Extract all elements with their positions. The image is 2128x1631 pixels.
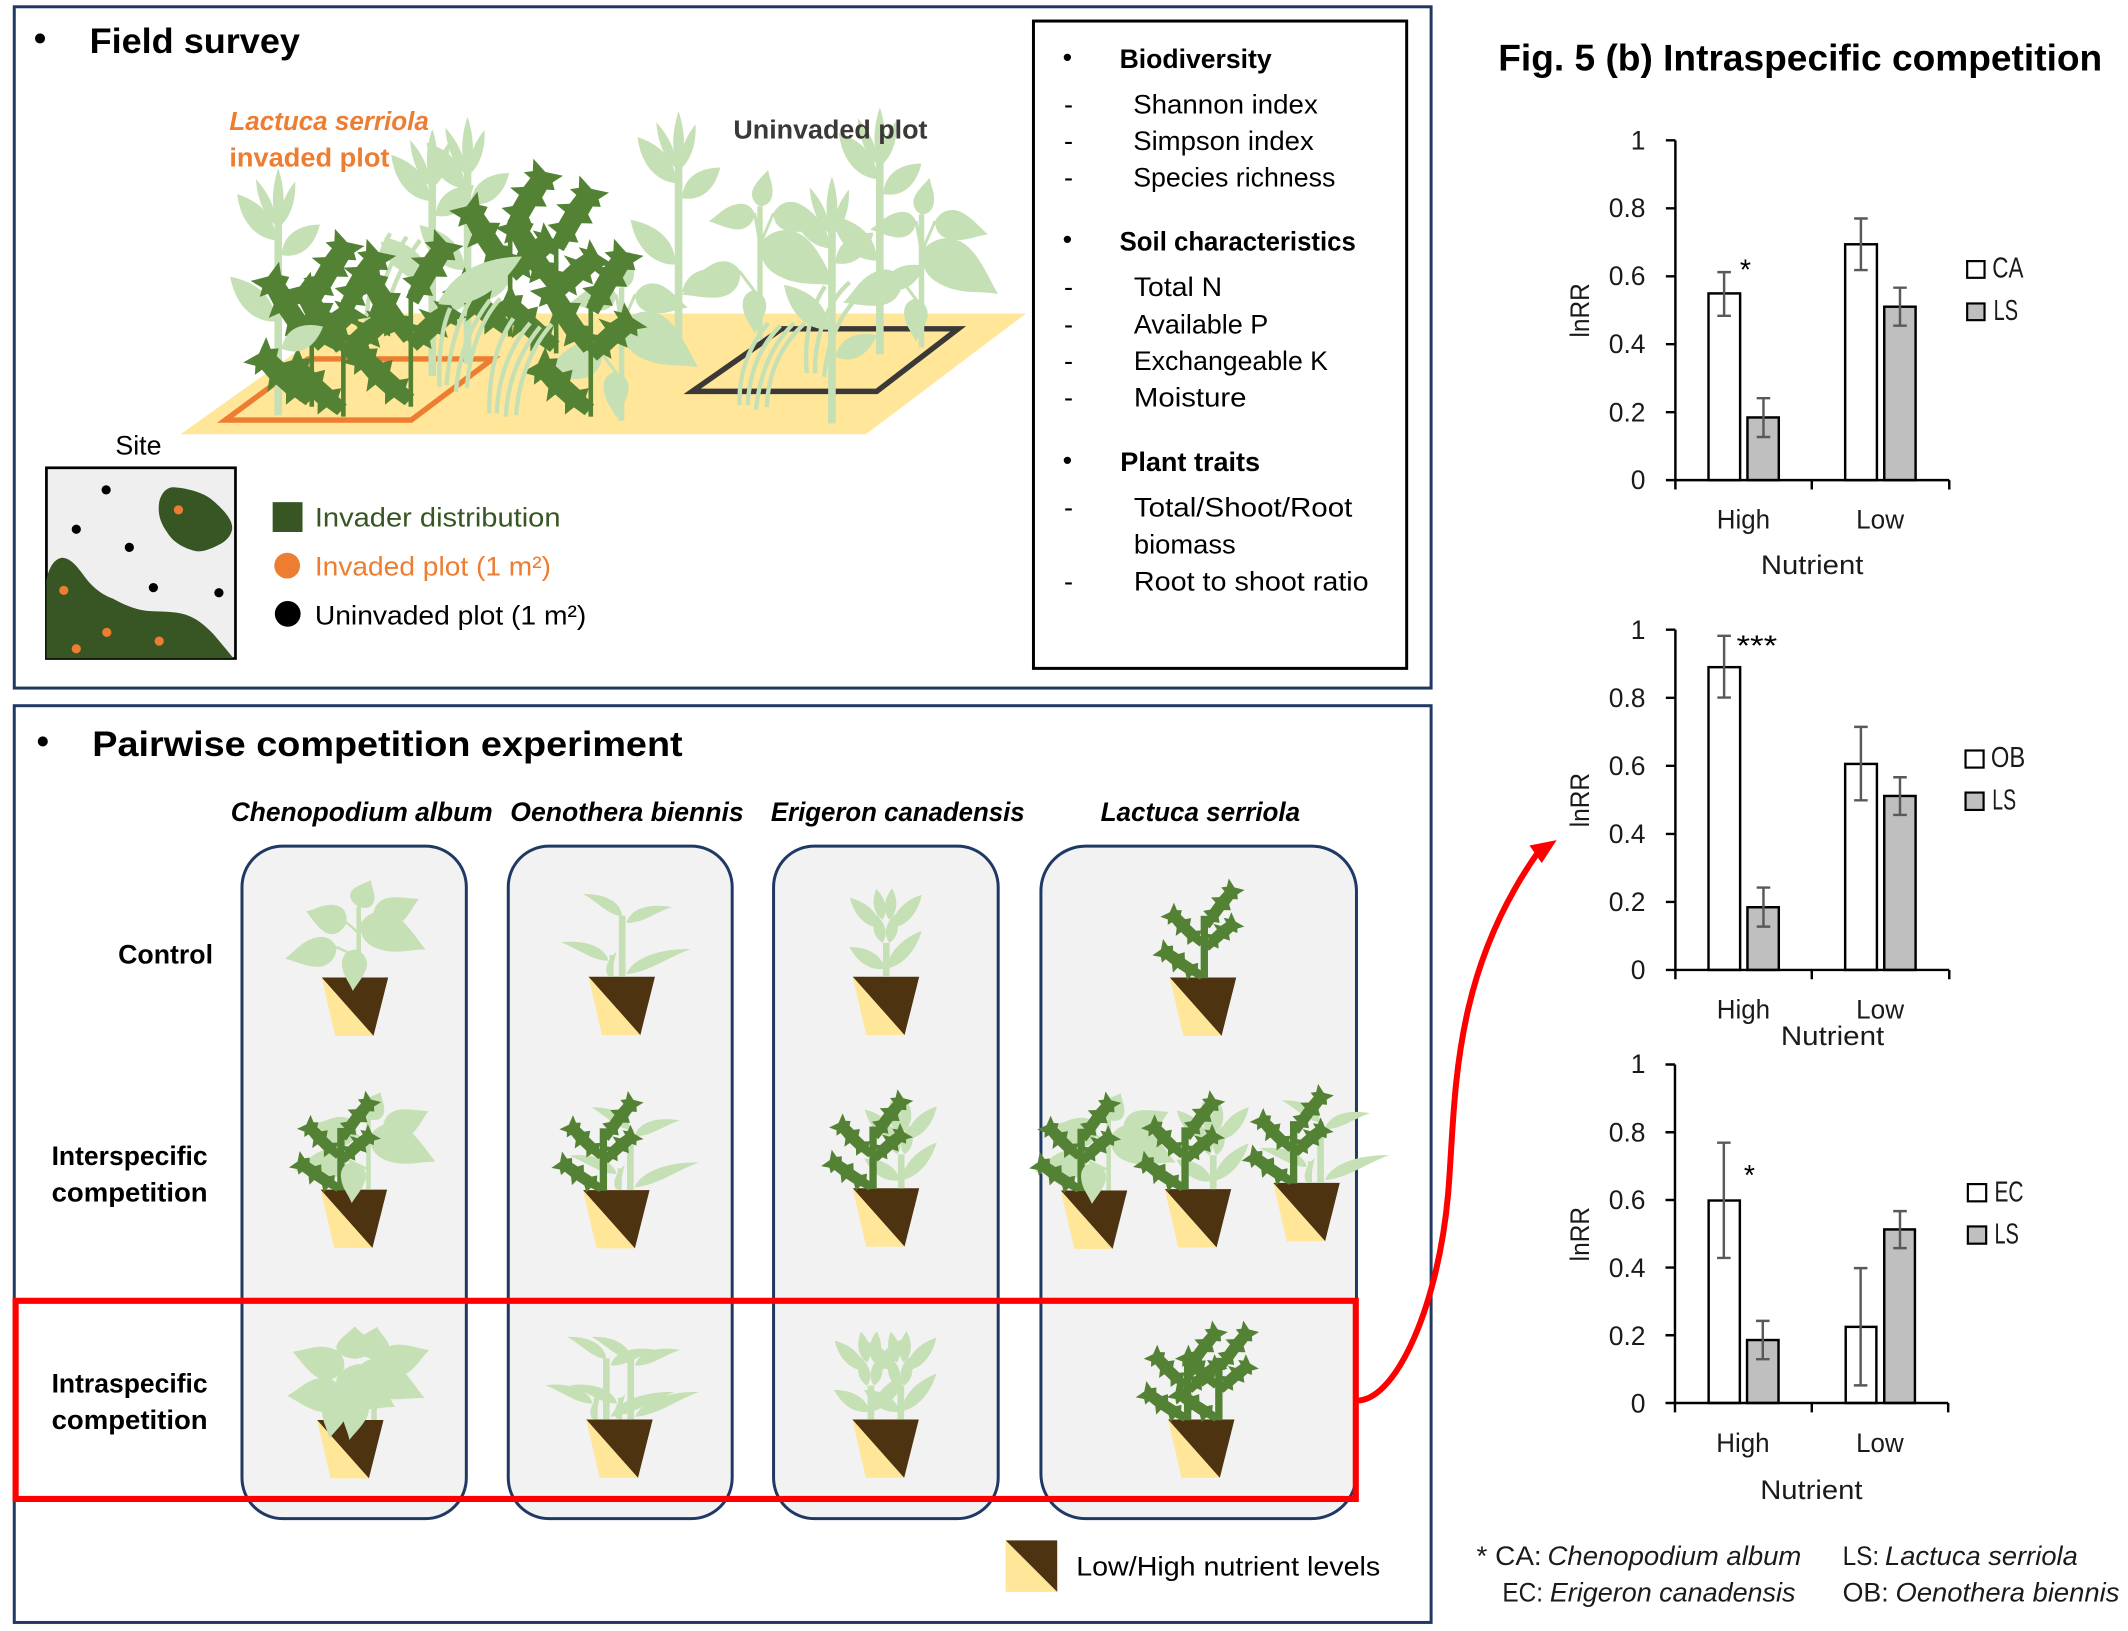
list: plant traits: Total/Shoot/Root <box>1134 492 1353 523</box>
list: soil characteristics: - <box>1064 382 1073 413</box>
significance marker: * <box>1744 1160 1755 1192</box>
x axis labels <box>1716 1428 1905 1505</box>
legend: LS <box>1994 1219 2019 1251</box>
list: soil characteristics: - <box>1064 345 1073 376</box>
interspecific pot <box>819 1087 942 1247</box>
y axis labels: 0.4 <box>1609 1253 1646 1283</box>
y axis labels: 0.8 <box>1609 193 1646 223</box>
y axis labels: 0.6 <box>1609 1185 1646 1215</box>
row label: control: Control <box>118 940 213 970</box>
row label: intraspecific competition <box>52 1368 208 1435</box>
control pot <box>560 887 692 1035</box>
species heading: Lactuca serriola: Lactuca serriola <box>1101 797 1300 827</box>
control pot <box>282 875 433 1036</box>
legend: low/high nutrient levels: Low/High nutrient levels <box>1076 1551 1380 1582</box>
ground <box>181 313 1026 434</box>
list: soil characteristics: Exchangeable K <box>1134 345 1328 376</box>
uninvaded plot outline <box>692 329 958 391</box>
x axis labels: High <box>1717 504 1770 534</box>
control pot <box>1151 877 1245 1036</box>
list: plant traits: • <box>1063 445 1072 476</box>
significance marker: *** <box>1736 630 1777 662</box>
footnote: species abbreviations: Oenothera biennis <box>1896 1577 2119 1607</box>
row label: interspecific competition <box>52 1141 208 1208</box>
legend <box>1966 742 2025 817</box>
light leaves behind dark plants <box>374 232 428 280</box>
legend: invaded plot: Invaded plot (1 m²) <box>315 550 551 581</box>
control pot <box>845 888 927 1035</box>
heading: pairwise competition experiment: • <box>37 722 49 761</box>
column: Lactuca serriola <box>1027 846 1390 1519</box>
significance marker: * <box>1740 255 1751 287</box>
error bars <box>1717 636 1907 927</box>
column: Erigeron canadensis <box>774 846 998 1519</box>
footnote: species abbreviations: LS: <box>1843 1541 1879 1571</box>
label: invaded plot: Lactuca serriola <box>229 108 429 136</box>
list: soil characteristics: • <box>1063 223 1072 254</box>
grass behind <box>366 233 860 377</box>
y axis title: lnRR <box>1565 283 1595 338</box>
intraspecific pot <box>544 1330 701 1478</box>
footnote: species abbreviations: Erigeron canadensis <box>1550 1577 1795 1607</box>
list: soil characteristics: - <box>1064 308 1073 339</box>
column: Chenopodium album <box>242 846 466 1519</box>
legend: LS <box>1992 785 2016 817</box>
panel: field survey <box>14 7 1431 688</box>
list: biodiversity: - <box>1064 162 1073 193</box>
y axis labels <box>1609 125 1646 495</box>
intraspecific pot <box>830 1331 942 1478</box>
list: soil characteristics: - <box>1064 271 1073 302</box>
list: soil characteristics <box>1063 223 1356 413</box>
invaded plot outline <box>225 359 493 420</box>
chart: EC vs LS <box>1565 1049 2023 1505</box>
label: site: Site <box>115 430 162 461</box>
footnote: species abbreviations: * CA: <box>1477 1541 1542 1571</box>
list: plant traits: Plant traits <box>1120 446 1260 477</box>
y axis labels <box>1609 615 1646 985</box>
intraspecific pot <box>286 1324 434 1478</box>
list: biodiversity: Biodiversity <box>1120 43 1272 74</box>
row label: interspecific competition: competition <box>52 1178 208 1208</box>
bars <box>1709 667 1916 970</box>
y axis labels: 0.6 <box>1609 261 1646 291</box>
species heading: Erigeron canadensis: Erigeron canadensis <box>771 797 1025 827</box>
x axis labels: Nutrient <box>1761 550 1864 580</box>
heading: field survey: Field survey <box>90 22 300 61</box>
list: plant traits: biomass <box>1134 528 1236 559</box>
y axis labels: 0.4 <box>1609 329 1646 359</box>
x axis labels: Low <box>1856 994 1905 1024</box>
column: Oenothera biennis <box>508 846 732 1519</box>
list: biodiversity <box>1063 41 1335 193</box>
y axis labels: 0.2 <box>1609 887 1646 917</box>
y axis labels: 0.4 <box>1609 819 1646 849</box>
bars <box>1709 244 1916 480</box>
legend: uninvaded plot: Uninvaded plot (1 m²) <box>315 599 586 630</box>
legend <box>1968 1176 2023 1251</box>
list: soil characteristics: Total N <box>1134 271 1222 302</box>
row label: intraspecific competition: Intraspecific <box>52 1368 208 1398</box>
footnote: species abbreviations <box>1477 1541 2119 1607</box>
footnote: species abbreviations: OB: <box>1843 1577 1889 1607</box>
error bars <box>1717 1143 1907 1385</box>
label: uninvaded plot: Uninvaded plot <box>733 116 928 144</box>
list: soil characteristics: Moisture <box>1134 382 1247 413</box>
interspecific pot <box>287 1087 443 1248</box>
interspecific pot <box>550 1089 700 1248</box>
list: plant traits <box>1063 445 1369 596</box>
x axis labels <box>1717 994 1905 1051</box>
grass in front <box>439 299 805 417</box>
y axis labels <box>1609 1049 1646 1418</box>
list: biodiversity: - <box>1064 88 1073 119</box>
footnote: species abbreviations: Chenopodium album <box>1548 1541 1801 1571</box>
list: biodiversity: • <box>1063 41 1072 72</box>
y axis labels: 0.2 <box>1609 397 1646 427</box>
highlight: intraspecific row <box>16 1301 1356 1499</box>
legend: EC <box>1994 1176 2023 1208</box>
x axis labels: Low <box>1856 1428 1905 1458</box>
label: invaded plot <box>229 108 429 173</box>
interspecific pot with Chenopodium <box>1027 1088 1183 1249</box>
tall light plants <box>222 107 1011 423</box>
legend: invader distribution: Invader distribution <box>315 502 561 533</box>
y axis labels: 1 <box>1631 125 1646 155</box>
arrow: intraspecific row to chart <box>1358 840 1557 1401</box>
axes <box>1665 1065 1948 1412</box>
species heading: Oenothera biennis: Oenothera biennis <box>510 797 744 827</box>
panel: measured variables <box>1033 21 1407 668</box>
heading: pairwise competition experiment: Pairwise competition experiment <box>92 725 683 764</box>
y axis labels: 0.8 <box>1609 683 1646 713</box>
list: soil characteristics: Available P <box>1134 308 1268 339</box>
legend: CA <box>1992 253 2023 285</box>
illustration: field plots with plants <box>181 107 1026 434</box>
legend: low/high nutrient levels <box>1006 1540 1380 1592</box>
list: soil characteristics: Soil characteristics <box>1120 225 1356 256</box>
panel: pairwise competition experiment <box>14 706 1431 1622</box>
y axis labels: 0 <box>1631 955 1646 985</box>
list: biodiversity: Shannon index <box>1133 88 1318 119</box>
x axis labels <box>1717 504 1905 580</box>
footnote: species abbreviations: Lactuca serriola <box>1885 1541 2078 1571</box>
interspecific pot with Oenothera <box>1240 1082 1390 1241</box>
y axis labels: 1 <box>1631 615 1646 645</box>
y axis labels: 1 <box>1631 1049 1646 1079</box>
x axis labels: High <box>1717 994 1770 1024</box>
species heading: Chenopodium album: Chenopodium album <box>231 797 493 827</box>
row label: intraspecific competition: competition <box>52 1405 208 1435</box>
axes <box>1666 140 1949 490</box>
list: biodiversity: Species richness <box>1133 162 1335 193</box>
legend <box>1967 253 2023 327</box>
footnote: species abbreviations: EC: <box>1502 1577 1543 1607</box>
x axis labels: Nutrient <box>1781 1021 1885 1051</box>
legend: LS <box>1994 295 2018 327</box>
y axis title: lnRR <box>1565 1207 1595 1261</box>
heading: field survey: • <box>34 19 46 58</box>
front light leaves <box>276 244 630 421</box>
y axis title: lnRR <box>1565 773 1595 827</box>
label: invaded plot: invaded plot <box>229 145 390 173</box>
y axis labels: 0 <box>1631 465 1646 495</box>
site map inset <box>46 468 235 658</box>
axes <box>1666 630 1949 979</box>
chart: CA vs LS <box>1565 125 2023 580</box>
x axis labels: Nutrient <box>1760 1475 1863 1505</box>
intraspecific pot <box>1134 1319 1260 1478</box>
list: plant traits: Root to shoot ratio <box>1134 565 1369 596</box>
bars <box>1709 1201 1915 1403</box>
list: biodiversity: Simpson index <box>1133 125 1314 156</box>
y axis labels: 0 <box>1631 1388 1646 1418</box>
dark invader plants <box>239 156 648 427</box>
y axis labels: 0.8 <box>1609 1117 1646 1147</box>
row label: interspecific competition: Interspecific <box>52 1141 208 1171</box>
error bars <box>1717 218 1907 437</box>
y axis labels: 0.2 <box>1609 1321 1646 1351</box>
x axis labels: High <box>1716 1428 1770 1458</box>
list: biodiversity: - <box>1064 125 1073 156</box>
legend: OB <box>1991 742 2025 774</box>
list: plant traits: - <box>1064 492 1073 523</box>
list: plant traits: - <box>1064 565 1073 596</box>
interspecific pot with Erigeron <box>1131 1088 1254 1247</box>
y axis labels: 0.6 <box>1609 751 1646 781</box>
chart title: Fig. 5 (b) Intraspecific competition <box>1498 38 2102 79</box>
chart: OB vs LS <box>1565 615 2025 1051</box>
x axis labels: Low <box>1856 504 1905 534</box>
